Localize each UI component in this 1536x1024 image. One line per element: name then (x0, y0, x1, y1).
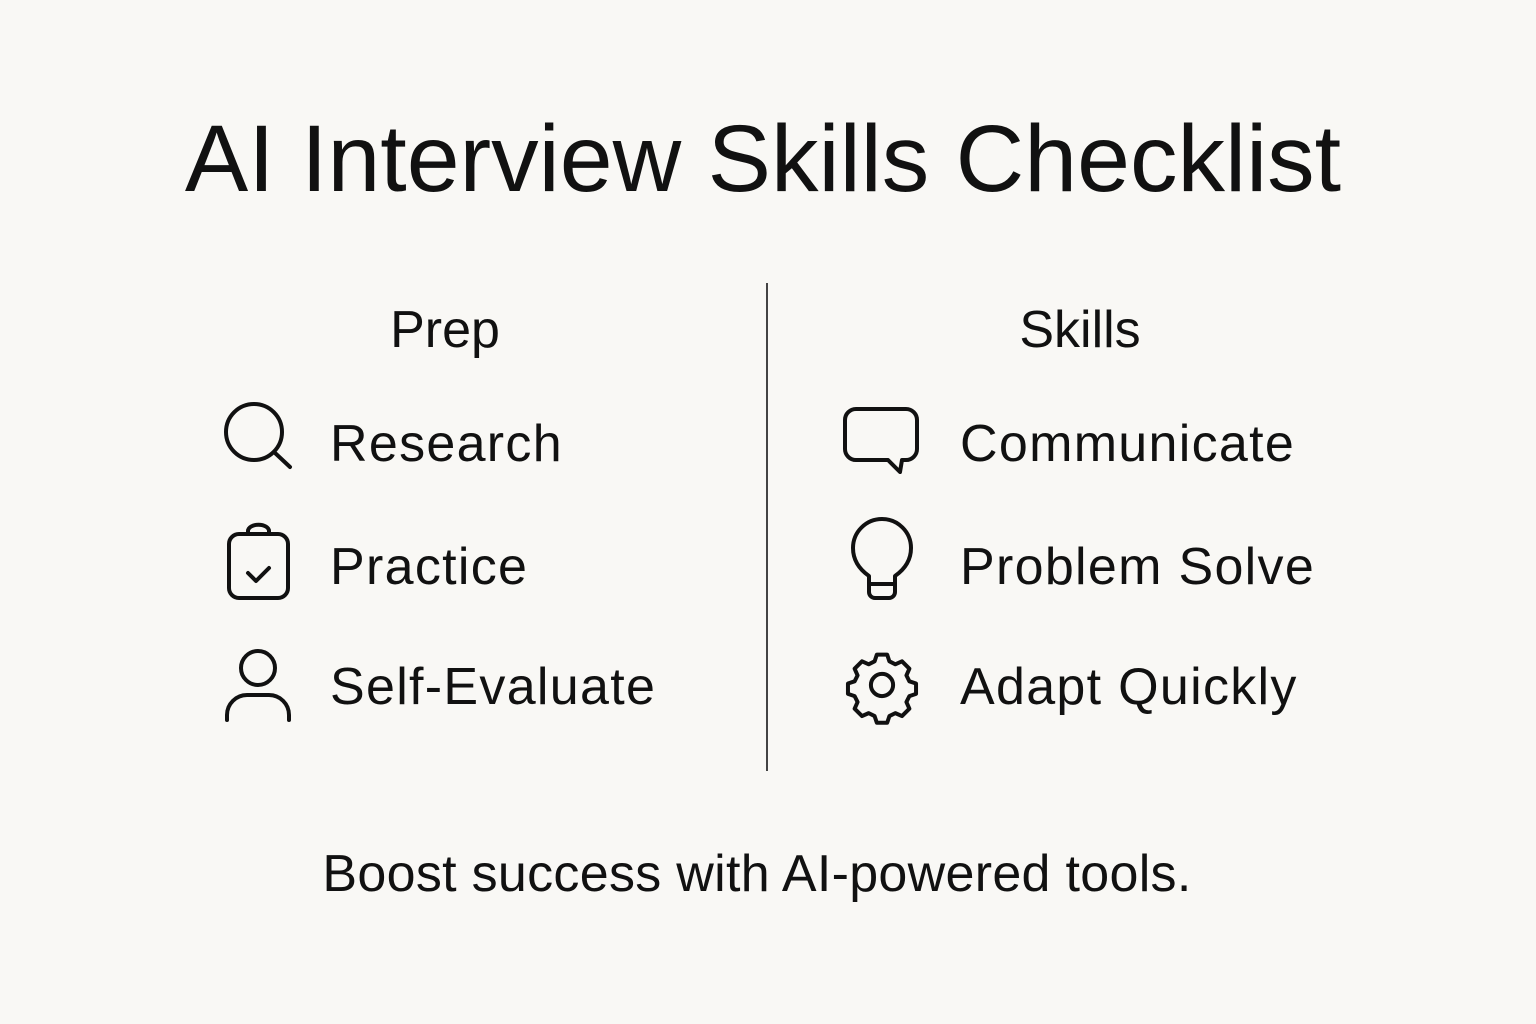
item: Communicate: Communicate (960, 415, 1295, 473)
heading: Skills: Skills (1019, 301, 1141, 359)
icon: magnifier (226, 404, 290, 467)
heading: Prep: Prep (390, 301, 500, 359)
icon: person (227, 651, 289, 720)
icon: light bulb (853, 519, 911, 598)
divider (766, 283, 768, 771)
item: Practice: Practice (330, 538, 528, 596)
item: Problem Solve: Problem Solve (960, 538, 1315, 596)
footer text: Boost success with AI-powered tools. (322, 845, 1192, 903)
item: Self-Evaluate: Self-Evaluate (330, 658, 656, 716)
title: AI Interview Skills Checklist (185, 106, 1341, 212)
item: Research: Research (330, 415, 563, 473)
item: Adapt Quickly: Adapt Quickly (960, 658, 1298, 716)
icon: gear (848, 655, 916, 723)
icon: clipboard (229, 525, 288, 598)
icon: speech bubble (845, 409, 917, 472)
